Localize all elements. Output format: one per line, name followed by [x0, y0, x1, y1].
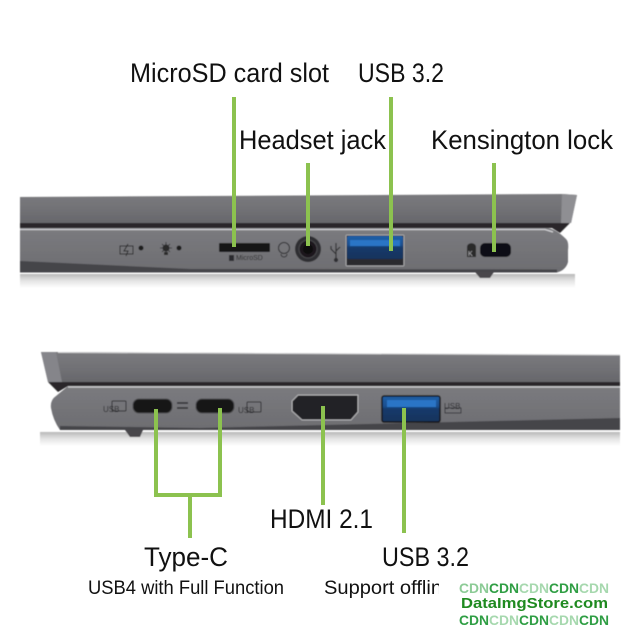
USB label left: USB: [103, 405, 119, 414]
icon: power LED: [160, 242, 182, 255]
label: USB 3.2 top: USB 3.2: [358, 58, 444, 88]
laptop base: [51, 386, 620, 430]
icon: headset: [278, 242, 290, 257]
base lower wedge: [20, 261, 557, 272]
line: Type-C bracket: [154, 408, 222, 538]
watermark: DataImgStore.com: [461, 595, 608, 612]
HDMI port: [292, 395, 358, 420]
hinge gap: [48, 382, 620, 392]
lid highlight: [58, 352, 620, 355]
headset jack: [295, 236, 321, 262]
line: headset jack: [306, 163, 310, 246]
icon: USB trident: [331, 243, 340, 262]
label: HDMI 2.1: HDMI 2.1: [270, 504, 373, 534]
watermark: [459, 580, 609, 628]
watermark: CDNCDNCDNCDNCDN: [459, 580, 609, 596]
laptop base: [20, 228, 568, 272]
line: USB bottom: [402, 408, 406, 533]
USB-C port 1: [133, 399, 172, 413]
Kensington lock: [467, 243, 511, 258]
base top highlight: [68, 386, 620, 388]
lid corner: [41, 352, 62, 382]
bottom laptop side view: [40, 352, 620, 446]
icon: battery LED: [120, 244, 144, 256]
watermark: CDNCDNCDNCDNCDN: [459, 612, 609, 628]
USB label left: [103, 401, 126, 414]
laptop lid: [41, 352, 620, 382]
caption: USB4 with Full Function: USB4 with Full Function: [88, 578, 284, 599]
lid corner: [561, 194, 577, 223]
laptop lid: [20, 194, 577, 223]
green leader lines: [154, 97, 494, 538]
base lower wedge: [60, 418, 620, 430]
MicroSD slot: [219, 243, 270, 262]
USB label right: USB: [238, 406, 254, 415]
USB 3.2 port bottom: [382, 396, 440, 422]
label: Kensington lock: Kensington lock: [431, 125, 613, 155]
floor shadow: [20, 274, 575, 288]
label: Headset jack: Headset jack: [239, 125, 386, 155]
floor shadow: [40, 432, 620, 446]
icon: USB charge: USB: [444, 402, 460, 411]
line: MicroSD: [232, 97, 236, 247]
line: HDMI: [321, 406, 325, 505]
label: USB 3.2 bottom: USB 3.2: [382, 542, 469, 572]
label: MicroSD card slot: MicroSD card slot: [130, 58, 329, 88]
USB 3.2 port top: [346, 235, 404, 266]
icon: thunderbolt dashes: [177, 403, 188, 408]
rubber foot: [125, 430, 143, 437]
USB-C port 2: [196, 399, 234, 413]
MicroSD slot: MicroSD: [236, 255, 263, 262]
label: Type-C: Type-C: [144, 542, 228, 572]
top laptop side view: [20, 194, 577, 288]
caption: Support offline (clipped): Support offlin: [324, 578, 442, 599]
hinge gap: [20, 223, 570, 233]
Kensington lock: K: [468, 251, 473, 258]
line: Kensington lock: [492, 163, 496, 252]
line: USB top: [389, 97, 393, 251]
USB label right: [238, 402, 261, 415]
base top highlight: [20, 230, 553, 232]
rubber foot: [475, 272, 494, 278]
